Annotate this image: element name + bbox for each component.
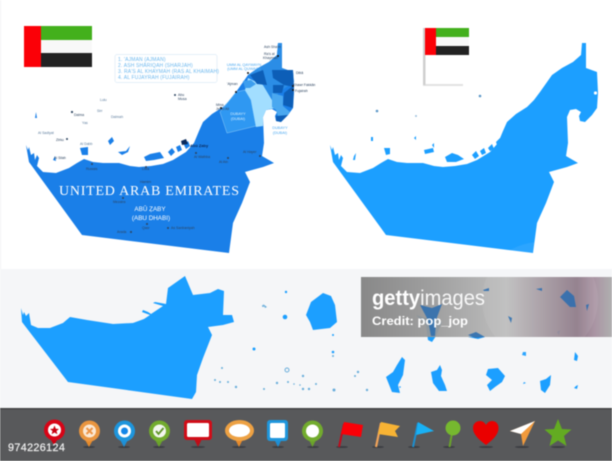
legend box: 3. RA'S AL KHAYMAH (RAS AL KHAIMAH) [118,69,219,75]
Fujairah [272,70,294,87]
place labels: 'Ajman [227,82,238,86]
place labels: Abu [178,93,184,97]
place labels: Ash Sha'm [264,45,281,49]
place labels: Al Wathba [194,155,210,159]
place labels: Zirku [56,138,64,142]
icon: red sign [184,420,212,447]
panel: solid map with flag [330,28,598,253]
pin shadows [49,446,565,448]
place labels: Al Dabb [80,142,93,146]
map: mainland [21,276,234,399]
exclave label: UMM AL QAYWAYN [227,63,261,67]
place labels: Ra's al [264,52,275,56]
place labels: Ruwais [86,167,98,171]
capital marker: Abu Dhabi [181,139,209,148]
place labels: Al Ain [219,160,228,164]
place labels: Dibā [296,71,303,75]
icon: navigation arrow [510,421,535,446]
place labels: Yas [82,121,88,125]
capital marker: Abu Dhabi: Abū Ẓaby [190,143,209,148]
place labels: Fujairah [295,89,308,93]
legend box [115,54,219,82]
place labels: Qasr [142,226,150,230]
panel: icon bar [0,408,612,461]
Ras al Khaimah [248,43,294,100]
place labels: Dalmah [111,115,123,119]
region label: Abu Dhabi: (ABU DHABI) [132,215,170,222]
Sharjah [245,78,275,127]
place labels: Sirr [97,109,103,113]
place labels [38,45,315,234]
islets [376,95,481,117]
icon: red star pin [44,420,65,445]
place labels: Al Silah [54,156,66,160]
place labels: Mina [216,103,224,107]
place labels: Hamim [140,180,151,184]
icon: green check pin [149,420,170,447]
exclave label: (UMM AL QUWAIN) [227,67,261,71]
place labels: Arada [117,230,126,234]
panel: detailed map [24,26,315,253]
place labels: As Sanbaniyah [171,226,195,230]
legend box: 2. ASH SHĀRIQAH (SHARJAH) [118,62,193,69]
place labels: Mezaira [113,200,126,204]
region label: Abu Dhabi [132,205,170,222]
title: country name: UNITED ARAB EMIRATES [59,184,239,199]
icon: green ball pin [446,420,460,447]
icon: orange flag [376,422,400,447]
place labels: Dalma [74,113,84,117]
Dubai [220,90,256,133]
islets [214,304,368,392]
icon: green star [544,419,572,446]
icon: green circle pin [302,420,323,447]
exclave label: (DUBAI) [273,131,288,135]
islands [353,136,501,162]
region label: Dubai [230,112,246,121]
place labels: Lulu [100,98,107,102]
icon: orange bubble [225,420,254,447]
exclave label: DUBAYY [272,126,288,130]
place labels: Musa [178,97,187,101]
exclave label [227,63,288,135]
flag on pole [423,28,469,86]
icon: blue ring pin [114,420,135,447]
map: emirates [26,43,294,253]
flag: large UAE [24,26,92,67]
legend box: 1. 'AJMAN (AJMAN) [118,57,166,63]
region label: Dubai: DUBAYY [230,112,246,116]
icon: heart [473,421,498,445]
icon: blue square [267,420,288,447]
Ajman [243,80,256,88]
place labels: Khawr Fakkān [293,83,315,87]
watermark [361,242,612,358]
region label: Abu Dhabi: ABŪ ẒABY [134,205,166,213]
image id: 974226124 [8,442,65,454]
coastal islands [35,112,190,161]
island: large [306,293,337,330]
map: UAE silhouette [330,43,598,253]
panel: enlarged mainland and islands [21,276,589,399]
watermark: Credit: pop_jop [372,314,468,328]
place labels: Al Hayer [243,150,257,154]
place labels: Jebel Ali [216,107,229,111]
island group [252,288,589,393]
region label: Dubai: (DUBAI) [231,117,246,121]
watermark: gettyimages [372,287,485,310]
place labels: Al Sadiyat [38,131,54,135]
place labels: Khaymah [263,56,278,60]
legend box: 4. AL FUJAYRAH (FUJAIRAH) [118,75,190,81]
place labels: Liwa [142,167,149,171]
icon: red flag [339,422,363,447]
icon: blue flag [413,422,434,447]
icon: orange cross pin [79,420,100,447]
